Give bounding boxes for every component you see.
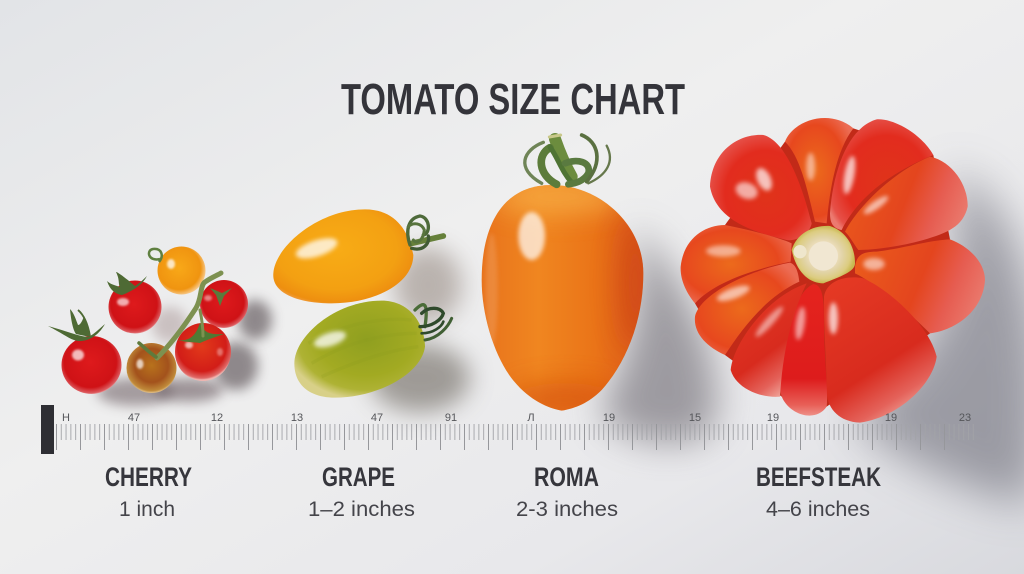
- ruler numbers: 19: [885, 412, 897, 424]
- lobe: upper right: [830, 119, 933, 230]
- ruler numbers: 91: [445, 412, 457, 424]
- label: grape: GRAPE: [322, 462, 395, 492]
- cherry tomatoes cluster: [48, 246, 248, 394]
- label: roma: ROMA: [534, 462, 599, 492]
- lobe: top: [785, 118, 853, 223]
- label: cherry: CHERRY: [105, 462, 192, 492]
- ruler numbers: 47: [128, 412, 140, 424]
- ruler numbers: 13: [291, 412, 303, 424]
- lobe: upper left: [710, 135, 812, 240]
- label: cherry: [105, 462, 192, 521]
- tomato: red cherry lower left: [48, 309, 122, 394]
- lobe: right upper: [845, 157, 968, 250]
- label: roma: 2-3 inches: [516, 498, 618, 521]
- label: grape: 1–2 inches: [308, 498, 415, 521]
- lobe: bottom right: [824, 277, 937, 423]
- label: grape: [308, 462, 415, 521]
- label: roma: [516, 462, 618, 521]
- ruler numbers: 19: [767, 412, 779, 424]
- lobe base: [695, 128, 950, 407]
- tomato: red-orange cherry: [175, 323, 231, 381]
- icon: green grape calyx: [415, 305, 452, 340]
- label: cherry: 1 inch: [119, 498, 175, 521]
- vine stem: [139, 273, 221, 358]
- tomatoes: grape and roma: [273, 135, 652, 417]
- ruler numbers: 19: [603, 412, 615, 424]
- ruler numbers: 23: [959, 412, 971, 424]
- tomato: red cherry upper: [107, 272, 162, 334]
- ruler numbers: Л: [527, 412, 535, 424]
- ruler ticks: [56, 424, 975, 440]
- ruler numbers: [62, 412, 971, 424]
- lobe: bottom center: [780, 284, 827, 416]
- title: TOMATO SIZE CHART: [341, 75, 685, 124]
- ruler numbers: 12: [211, 412, 223, 424]
- ruler end bar: [41, 405, 54, 454]
- label: beefsteak: [756, 462, 881, 521]
- ruler numbers: H: [62, 412, 70, 424]
- lobe: left lower: [695, 263, 799, 355]
- lobe: left: [681, 225, 792, 303]
- cast shadows: [97, 170, 1024, 505]
- lobe: right: [855, 239, 985, 333]
- tomato: red cherry right: [200, 280, 248, 328]
- tomato: olive cherry: [126, 343, 176, 393]
- lobe highlights: [706, 153, 890, 340]
- tomato: yellow grape: [273, 209, 443, 303]
- icon: yellow grape calyx: [408, 216, 443, 249]
- label: beefsteak: 4–6 inches: [766, 498, 870, 521]
- tomato: yellow cherry: [149, 246, 206, 294]
- tomato: beefsteak: [681, 118, 985, 423]
- ruler numbers: 47: [371, 412, 383, 424]
- lobe: bottom left: [731, 283, 807, 397]
- label: beefsteak: BEEFSTEAK: [756, 462, 881, 492]
- ruler numbers: 15: [689, 412, 701, 424]
- ruler: [41, 405, 975, 454]
- icon: roma calyx: [525, 135, 610, 184]
- core: [792, 226, 855, 283]
- tomato: green grape: [294, 301, 452, 398]
- tomato: roma: [482, 135, 652, 417]
